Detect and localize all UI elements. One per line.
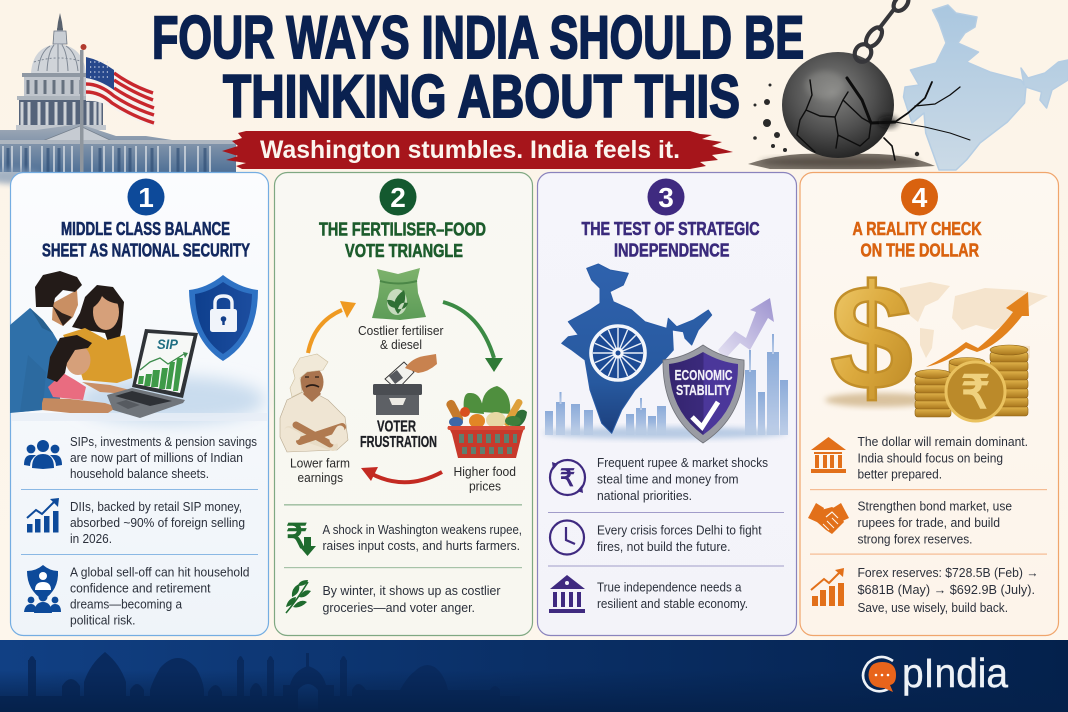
number badge 4 — [901, 178, 938, 216]
icon: rupee in circular arrows: ₹ — [560, 465, 575, 492]
text block: rupee and market shocks: steal time and money from — [597, 472, 738, 486]
text block: strengthen bond market — [808, 500, 1012, 546]
icon: rupee in circular arrows — [550, 460, 585, 495]
number badge 3 — [648, 178, 684, 216]
arrow: orange farm to fertiliser — [308, 301, 356, 353]
text block: costlier groceries and voter anger — [286, 580, 500, 615]
illustration: mother — [63, 285, 134, 394]
icon: security shield with padlock — [189, 275, 258, 361]
icon: leaf sprig — [286, 580, 311, 613]
number badge 2: 2 — [390, 182, 406, 213]
label: lower farm earnings: earnings — [298, 470, 343, 485]
text block: DIIs absorbed foreign selling: in 2026. — [70, 532, 112, 546]
illustration: gold dollar, world map, coins and rising arrow — [825, 253, 1048, 421]
icon: shield with people — [24, 565, 61, 613]
icon: orange bank building — [811, 437, 846, 473]
panel: card 2 fertiliser food vote triangle — [274, 172, 532, 636]
icon: basket of vegetables — [445, 386, 527, 458]
illustration: SIP laptop — [107, 329, 198, 418]
heading: card 1 — [42, 218, 250, 260]
number badge 3: 3 — [658, 182, 674, 213]
skyline — [545, 334, 788, 435]
icon: Ashoka chakra — [591, 326, 645, 380]
text block: forex reserves — [811, 566, 1038, 615]
label: voter frustration: VOTER — [377, 418, 416, 436]
label: costlier fertiliser and diesel — [358, 323, 444, 352]
text block: strengthen bond market: rupees for trade, and build — [858, 516, 1000, 530]
illustration: wrecking ball with chain and cracks — [748, 0, 970, 169]
label: higher food prices: prices — [469, 478, 501, 494]
text block: shock weakens rupee: A shock in Washington weakens rupee, — [322, 523, 522, 537]
logo: OpIndia: pIndia — [902, 650, 1008, 696]
label: lower farm earnings — [290, 456, 350, 485]
icon: gold dollar sign: $ — [830, 253, 913, 421]
text block: costlier groceries and voter anger: groceries—and voter anger. — [322, 601, 475, 615]
text block: dollar remains dominant: The dollar will remain dominant. — [858, 435, 1028, 449]
icon: fertiliser bag — [372, 268, 426, 320]
icon: coin stacks: ₹ — [961, 366, 990, 418]
illustration: India map behind wrecking ball — [904, 5, 1068, 170]
label: higher food prices — [454, 464, 516, 494]
text block: resilient economy: True independence needs a — [597, 580, 742, 594]
illustration: father's forearm and sleeve — [20, 355, 117, 413]
illustration: SIP laptop: SIP — [157, 336, 179, 352]
illustration: India map, skyline and economic stability shield — [543, 264, 788, 443]
text block: global sell-off risk: A global sell-off can hit household — [70, 566, 250, 580]
label: voter frustration: FRUSTRATION — [360, 434, 437, 451]
heading: card 2: THE FERTILISER–FOOD — [319, 218, 486, 240]
icon: clock — [550, 520, 584, 554]
icon: people — [24, 440, 62, 469]
illustration: farmer with turban — [280, 354, 348, 452]
heading: card 2: VOTE TRIANGLE — [345, 240, 463, 261]
text block: forex reserves: Save, use wisely, build back. — [858, 601, 1008, 615]
number badge 4: 4 — [912, 182, 928, 213]
icon: rising purple arrow — [718, 298, 774, 360]
number badge 1: 1 — [138, 182, 154, 213]
text block: rupee and market shocks: national priorities. — [597, 489, 692, 503]
text block: forex reserves: Forex reserves: $728.5B (Feb) → — [858, 566, 1038, 580]
text block: global sell-off risk — [24, 565, 250, 628]
panel: card 3 test of strategic independence — [538, 172, 796, 636]
title: THINKING ABOUT THIS — [223, 63, 740, 130]
panel: card 4 reality check on the dollar — [800, 172, 1058, 636]
heading: card 4 — [852, 218, 982, 260]
heading: card 3: THE TEST OF STRATEGIC — [582, 218, 760, 239]
icon: ballot box and hand — [373, 354, 437, 415]
illustration: US Capitol building — [0, 13, 236, 184]
icon: rupee with down arrow: ₹ — [286, 518, 308, 556]
number badge 2 — [380, 178, 416, 216]
footer band with monument skyline — [0, 640, 1068, 712]
label: lower farm earnings: Lower farm — [290, 456, 350, 470]
text block: rupee and market shocks: Frequent rupee & market shocks — [597, 456, 768, 470]
text block: resilient economy — [549, 575, 748, 613]
subtitle banner: Washington stumbles. India feels it. — [260, 136, 680, 164]
label: costlier fertiliser and diesel: & diesel — [380, 337, 422, 352]
number badge 1 — [128, 178, 164, 216]
icon: rising bar chart — [27, 498, 59, 532]
panel: card 1 middle class balance sheet — [10, 172, 268, 636]
icon: orange rising chart — [811, 568, 844, 606]
icon: bank building — [549, 575, 585, 613]
text block: DIIs absorbed foreign selling: absorbed ~90% of foreign selling — [70, 516, 245, 530]
heading: card 4: ON THE DOLLAR — [860, 240, 979, 260]
icon: handshake — [808, 503, 849, 534]
heading: card 1: SHEET AS NATIONAL SECURITY — [42, 240, 250, 260]
silhouette: Indian monuments — [0, 652, 520, 712]
illustration: child — [47, 335, 92, 400]
arrow: red food to farm — [361, 467, 442, 482]
illustration: father torso — [10, 271, 82, 413]
text block: global sell-off risk: confidence and retirement — [70, 582, 211, 596]
text block: SIPs and pension savings: SIPs, investments & pension savings — [70, 435, 257, 449]
text block: rupee and market shocks — [550, 456, 768, 503]
text block: Delhi fights fires: Every crisis forces Delhi to fight — [597, 524, 762, 538]
subtitle banner — [222, 131, 733, 169]
icon: economic stability shield: STABILITY — [676, 382, 731, 399]
icon: economic stability shield — [663, 345, 744, 443]
icon: rising orange arrow — [926, 292, 1029, 367]
text block: shock weakens rupee: raises input costs, and hurts farmers. — [322, 539, 520, 553]
text block: DIIs absorbed foreign selling: DIIs, backed by retail SIP money, — [70, 500, 242, 514]
text block: Delhi fights fires: fires, not build the future. — [597, 540, 730, 554]
text block: resilient economy: resilient and stable economy. — [597, 597, 748, 611]
text block: forex reserves: $681B (May) → $692.9B (July). — [858, 583, 1035, 597]
icon: coin stacks — [915, 345, 1028, 421]
label: costlier fertiliser and diesel: Costlier fertiliser — [358, 323, 444, 338]
label: higher food prices: Higher food — [454, 464, 516, 479]
text block: dollar remains dominant: India should focus on being — [858, 452, 1003, 466]
text block: strengthen bond market: Strengthen bond market, use — [858, 500, 1012, 514]
title: FOUR WAYS INDIA SHOULD BE — [152, 4, 804, 71]
heading: card 4: A REALITY CHECK — [852, 218, 982, 239]
heading: card 2 — [319, 218, 486, 261]
diagram: fertiliser-food vote cycle — [280, 268, 527, 494]
text block: Delhi fights fires — [550, 520, 762, 554]
world map backdrop — [900, 282, 1048, 358]
text block: strengthen bond market: strong forex reserves. — [858, 532, 972, 546]
heading: card 3 — [582, 218, 760, 260]
text block: dollar remains dominant — [811, 435, 1028, 482]
text block: shock weakens rupee — [286, 518, 522, 556]
text block: SIPs and pension savings — [24, 435, 257, 481]
map of India — [562, 264, 712, 433]
text block: global sell-off risk: dreams—becoming a — [70, 598, 182, 612]
text block: DIIs absorbed foreign selling — [27, 498, 245, 546]
text block: SIPs and pension savings: are now part of millions of Indian — [70, 451, 243, 465]
arrow: green fertiliser to food — [443, 302, 503, 372]
heading: card 3: INDEPENDENCE — [614, 240, 730, 260]
illustration: family with SIP laptop and security shield — [10, 271, 268, 424]
label: voter frustration — [360, 418, 437, 451]
text block: dollar remains dominant: better prepared. — [858, 468, 942, 482]
text block: SIPs and pension savings: household balance sheets. — [70, 467, 209, 481]
icon: American flag — [80, 44, 155, 172]
heading: card 1: MIDDLE CLASS BALANCE — [61, 218, 230, 239]
text block: costlier groceries and voter anger: By winter, it shows up as costlier — [322, 584, 500, 598]
icon: economic stability shield: ECONOMIC — [674, 367, 733, 384]
title — [152, 4, 804, 130]
text block: global sell-off risk: political risk. — [70, 614, 136, 628]
